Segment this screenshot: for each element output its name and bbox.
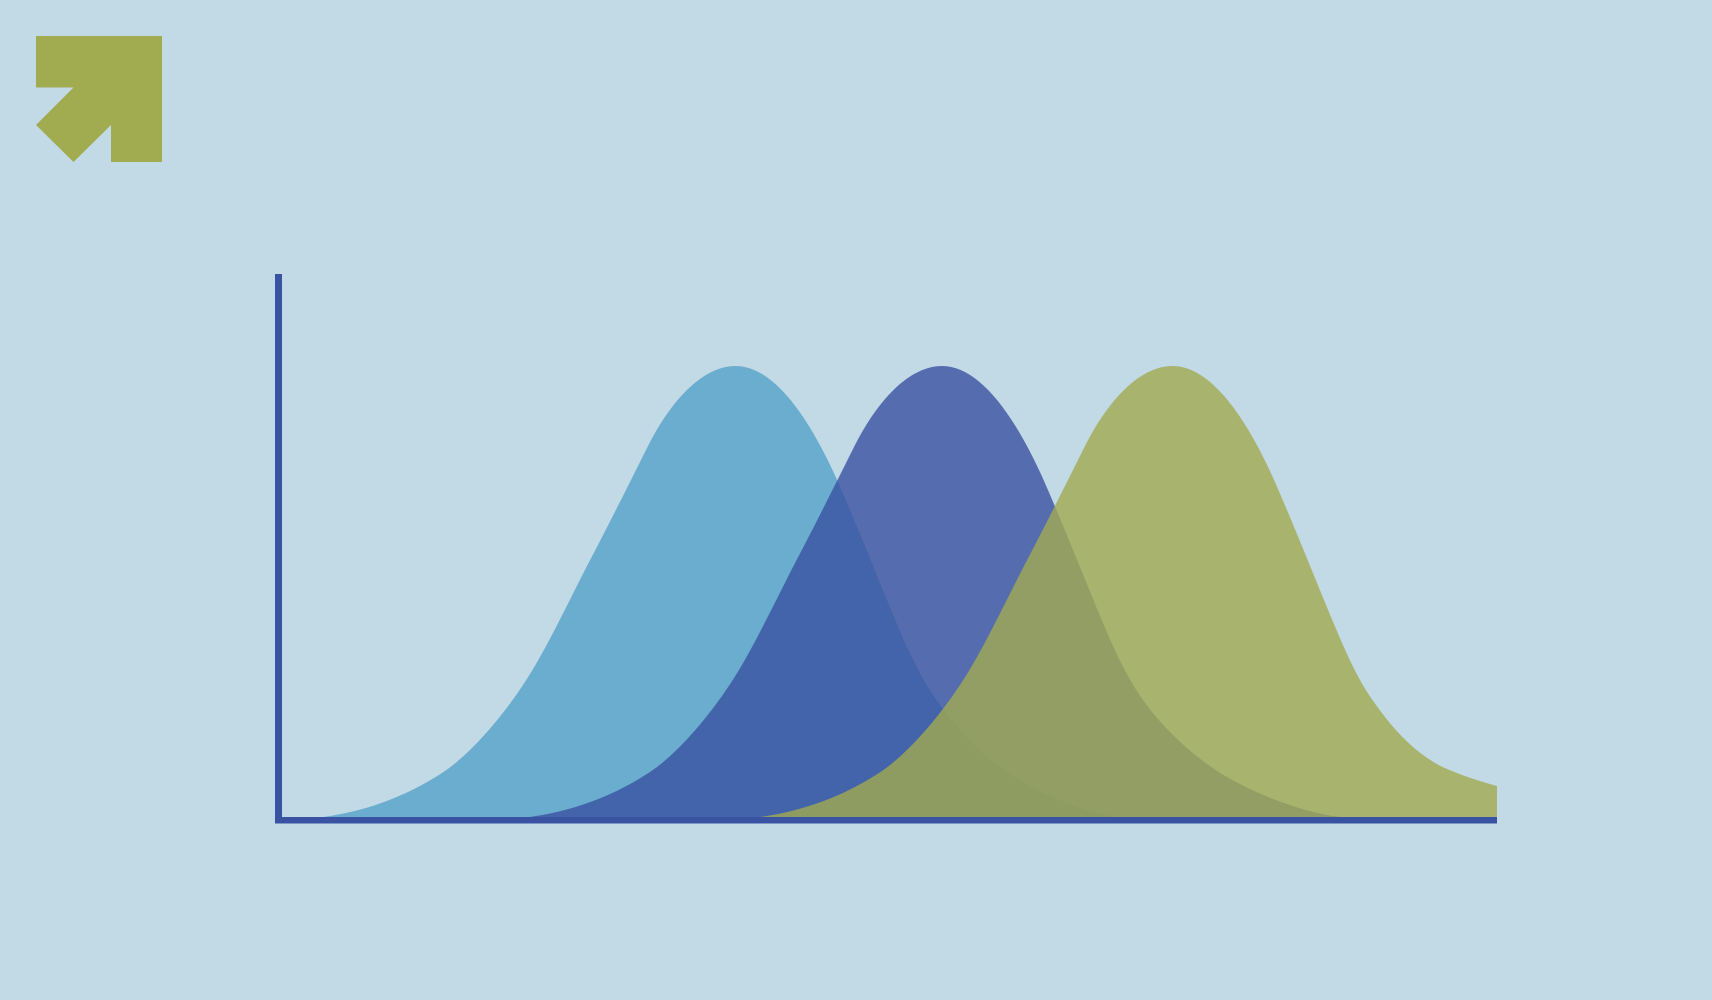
icon: up-right arrow <box>36 36 162 162</box>
curve: light blue distribution <box>324 366 1118 817</box>
y axis <box>275 274 282 824</box>
curve: olive distribution <box>760 366 1497 817</box>
x axis <box>275 817 1497 824</box>
curve: navy distribution <box>530 366 1340 817</box>
distribution chart <box>275 274 1497 824</box>
